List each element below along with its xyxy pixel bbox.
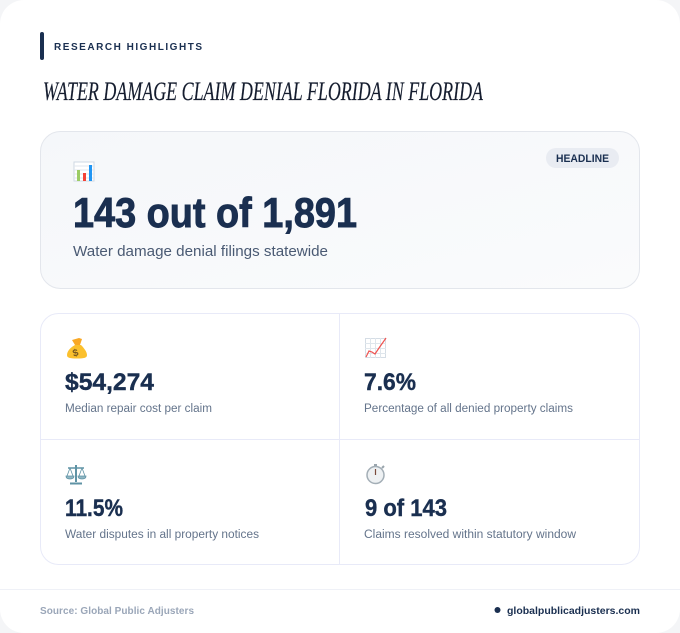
website: globalpublicadjusters.com [507, 605, 640, 617]
label: Median repair cost per claim [65, 403, 212, 415]
badge: headline [546, 148, 619, 168]
stat: median repair cost [65, 338, 212, 415]
icon: stopwatch [367, 464, 384, 484]
label: Percentage of all denied property claims [364, 403, 573, 415]
value: $54,274 [65, 369, 155, 396]
eyebrow: research highlights [40, 32, 202, 60]
label: Claims resolved within statutory window [364, 529, 577, 541]
eyebrow: research highlights: RESEARCH HIGHLIGHTS [54, 42, 202, 53]
icon: money bag [67, 338, 87, 360]
icon: rising chart [365, 338, 386, 358]
label: Water disputes in all property notices [65, 529, 259, 541]
icon: balance scales [66, 465, 86, 484]
source: Source: Global Public Adjusters [40, 606, 194, 617]
icon: bar chart [74, 162, 94, 181]
title: WATER DAMAGE CLAIM DENIAL FLORIDA IN FLORIDA [43, 77, 483, 106]
badge: headline: HEADLINE [556, 153, 609, 165]
headline value: 143 out of 1,891 [73, 189, 357, 236]
panel: stat grid [40, 314, 640, 564]
footer [0, 590, 680, 617]
stat: share of denied claims [364, 338, 573, 415]
headline description: Water damage denial filings statewide [73, 244, 328, 260]
value: 7.6% [364, 369, 416, 396]
panel: headline stat [40, 132, 640, 288]
value: 9 of 143 [365, 495, 447, 522]
stat: claims resolved [364, 464, 577, 541]
stat: water disputes [65, 465, 259, 541]
value: 11.5% [65, 495, 123, 522]
icon: money bag: $ [72, 347, 80, 360]
